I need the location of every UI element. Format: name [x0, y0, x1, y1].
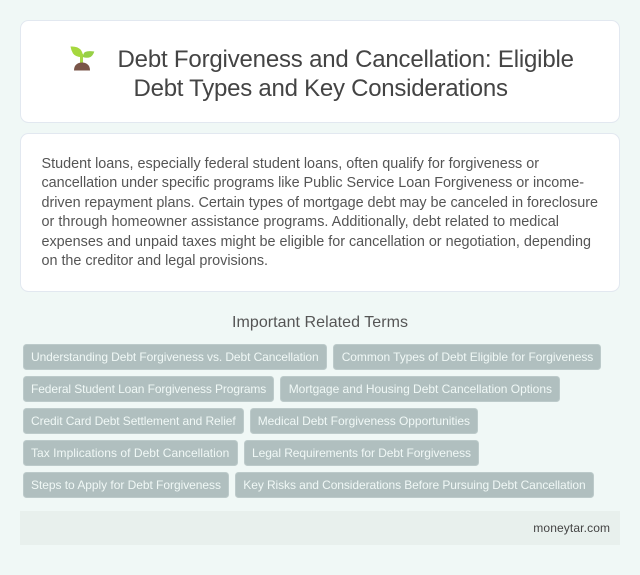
title text [118, 46, 574, 102]
tag: key risks: Key Risks and Considerations Before Pursuing Debt Cancellation [243, 478, 586, 492]
tag: medical: Medical Debt Forgiveness Opportunities [258, 414, 470, 428]
paragraph text: cancellation under specific programs like Public Service Loan Forgiveness or income- [42, 175, 584, 191]
tag: credit card: Credit Card Debt Settlement and Relief [31, 414, 236, 428]
paragraph text: Student loans, especially federal student loans, often qualify for forgiveness or [42, 156, 539, 172]
footer text: moneytar.com [533, 521, 610, 535]
tag: tax: Tax Implications of Debt Cancellation [31, 446, 229, 460]
paragraph text: on the creditor and legal provisions. [42, 253, 268, 269]
tag: understanding: Understanding Debt Forgiveness vs. Debt Cancellation [31, 350, 319, 364]
footer [20, 511, 620, 545]
panel: related term tags [24, 344, 600, 498]
tag: medical [250, 408, 478, 434]
tag: key risks [236, 472, 594, 498]
paragraph text: expenses and unpaid taxes might be eligible for cancellation or negotiation, depending [42, 234, 591, 250]
tag: legal [244, 440, 478, 466]
tag: understanding [24, 344, 326, 370]
icon: sprout [70, 46, 94, 70]
tag: steps: Steps to Apply for Debt Forgiveness [31, 478, 221, 492]
tag: federal student loan: Federal Student Loan Forgiveness Programs [31, 382, 266, 396]
panel: title card [20, 20, 620, 122]
paragraph text: or through homeowner assistance programs. Additionally, debt related to medical [42, 214, 559, 230]
tag: federal student loan [24, 376, 274, 402]
tag: common types: Common Types of Debt Eligible for Forgiveness [342, 350, 593, 364]
tag: common types [334, 344, 600, 370]
paragraph text: driven repayment plans. Certain types of mortgage debt may be canceled in foreclosure [42, 195, 598, 211]
panel: summary paragraph [20, 134, 620, 292]
tag: mortgage [280, 376, 560, 402]
tag: tax [24, 440, 238, 466]
paragraph text [42, 156, 598, 269]
title text: Debt Types and Key Considerations [134, 75, 508, 102]
title text: Debt Forgiveness and Cancellation: Eligible [118, 46, 574, 73]
tag: legal: Legal Requirements for Debt Forgiveness [252, 446, 471, 460]
heading: related terms: Important Related Terms [232, 314, 408, 331]
tag: credit card [24, 408, 244, 434]
tag: steps [24, 472, 228, 498]
tag: mortgage: Mortgage and Housing Debt Cancellation Options [289, 382, 552, 396]
